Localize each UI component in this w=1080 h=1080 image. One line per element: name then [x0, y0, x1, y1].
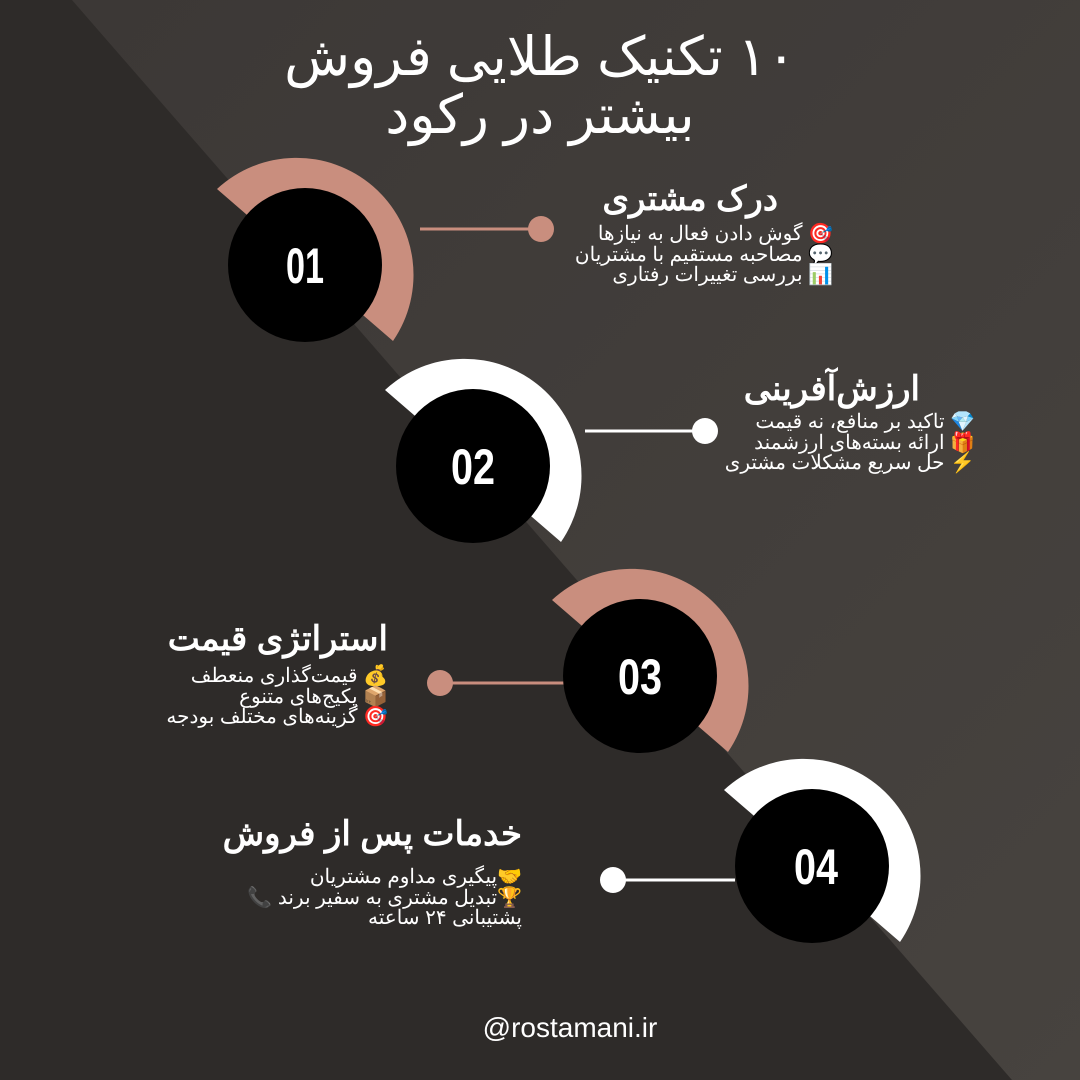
text block 2 — [725, 366, 975, 474]
step 3 graphic: 03 — [618, 649, 662, 705]
step 4 graphic — [600, 759, 921, 943]
step 1 graphic — [217, 158, 554, 342]
text block 2: ارزش‌آفرینی — [744, 370, 920, 408]
step 2 graphic: 02 — [451, 439, 495, 495]
step 4 graphic: 04 — [794, 839, 838, 895]
text block 4: خدمات پس از فروش — [223, 815, 522, 853]
text block 1: درک مشتری — [602, 180, 778, 218]
text block 1: 💬 مصاحبه مستقیم با مشتریان — [575, 244, 833, 266]
text block 3: 💰 قیمت‌گذاری منعطف — [191, 665, 388, 687]
step 3 graphic — [427, 569, 749, 753]
text block 2: ⚡ حل سریع مشکلات مشتری — [725, 452, 975, 474]
text block 4: 🤝پیگیری مداوم مشتریان — [310, 866, 522, 888]
text block 4: 🏆تبدیل مشتری به سفیر برند 📞 — [247, 886, 522, 908]
step 1 graphic: 01 — [286, 238, 324, 294]
text block 2: 🎁 ارائه بسته‌های ارزشمند — [754, 432, 975, 454]
title: ۱۰ تکنیک طلایی فروش — [284, 27, 796, 87]
footer handle: @rostamani.ir — [483, 1012, 657, 1043]
text block 3: استراتژی قیمت — [168, 620, 388, 658]
text block 3 — [166, 620, 388, 728]
text block 3: 📦 پکیج‌های متنوع — [239, 686, 388, 708]
text block 2: 💎 تاکید بر منافع، نه قیمت — [755, 411, 975, 433]
text block 3: 🎯 گزینه‌های مختلف بودجه — [166, 706, 388, 728]
text block 1: 🎯 گوش دادن فعال به نیازها — [598, 223, 833, 245]
title: بیشتر در رکود — [385, 85, 695, 145]
text block 1 — [575, 180, 833, 286]
title — [284, 27, 796, 146]
text block 1: 📊 بررسی تغییرات رفتاری — [612, 264, 833, 286]
step 2 graphic — [385, 359, 718, 543]
text block 4 — [223, 815, 522, 929]
text block 4: پشتیبانی ۲۴ ساعته — [368, 907, 522, 929]
